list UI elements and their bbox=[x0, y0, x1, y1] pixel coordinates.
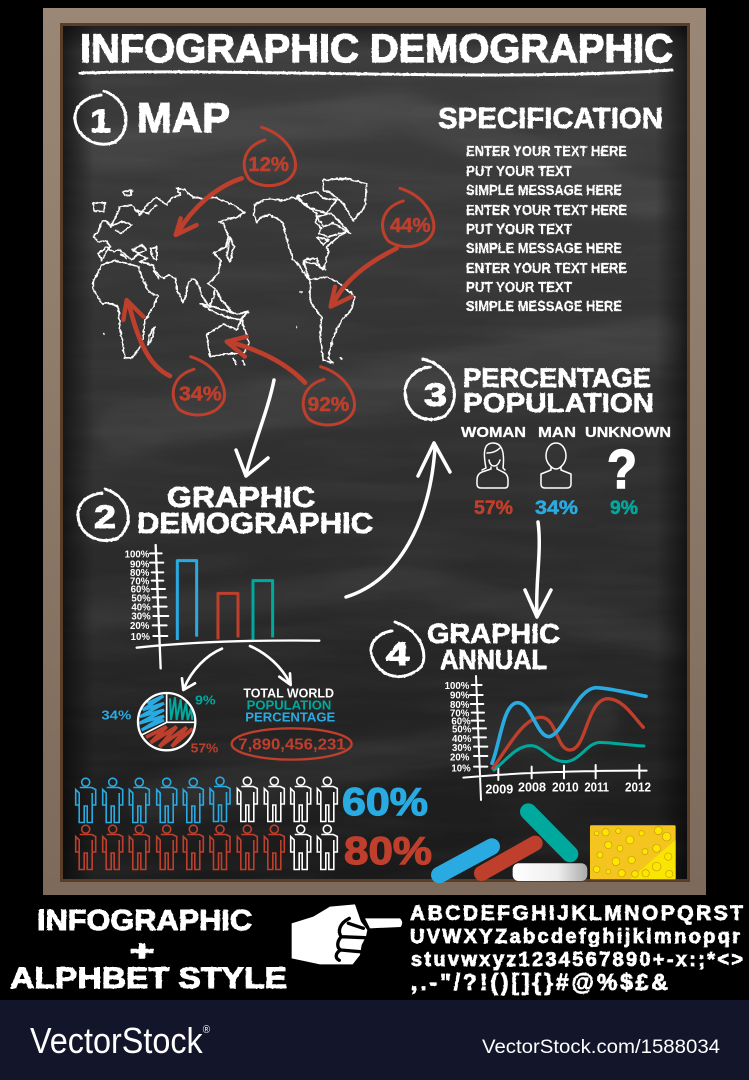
section 3 heading: percentage population: POPULATION bbox=[463, 388, 654, 418]
arrow: to pie bbox=[182, 649, 222, 690]
bar chart axes bbox=[137, 545, 319, 668]
line: red bbox=[493, 699, 643, 768]
line chart bbox=[439, 676, 676, 881]
section 4 heading: graphic annual: 4 bbox=[386, 636, 409, 672]
line chart axes bbox=[463, 676, 647, 800]
pie labels bbox=[101, 694, 218, 756]
line chart scale labels: 30% bbox=[452, 743, 472, 754]
bar chart scale labels: 50% bbox=[131, 593, 151, 604]
pictogram row: 60%: 60% bbox=[342, 781, 428, 824]
line chart year labels: 2009 bbox=[485, 782, 513, 796]
specification text block: SIMPLE MESSAGE HERE bbox=[466, 298, 622, 315]
chalk: teal bbox=[528, 812, 570, 854]
callout: 44%: 44% bbox=[390, 215, 431, 237]
line chart year labels: 2010 bbox=[552, 780, 579, 794]
chalkboard surface bbox=[63, 26, 687, 879]
pictogram row: 80%: 80% bbox=[344, 830, 432, 873]
map: central america link bbox=[303, 258, 327, 270]
map: madagascar bbox=[147, 327, 155, 345]
chalk: red bbox=[482, 843, 535, 873]
bar chart scale labels: 60% bbox=[131, 585, 150, 596]
map: south america bbox=[310, 277, 355, 363]
specification text block: ENTER YOUR TEXT HERE bbox=[466, 260, 627, 277]
callout: 34% bbox=[123, 300, 225, 415]
title: INFOGRAPHIC DEMOGRAPHIC bbox=[80, 27, 673, 71]
chalk pieces bbox=[439, 812, 587, 881]
callout: 44% bbox=[331, 188, 434, 307]
line chart scale labels: 60% bbox=[451, 716, 471, 727]
line chart year labels: 2012 bbox=[625, 781, 651, 795]
specification text block: PUT YOUR TEXT bbox=[466, 163, 572, 180]
total world population percentage: TOTAL WORLD bbox=[243, 686, 334, 700]
bar chart scale labels: 10% bbox=[131, 632, 150, 643]
section 2 heading: graphic demographic: DEMOGRAPHIC bbox=[137, 508, 373, 540]
unknown column: ? bbox=[607, 438, 637, 500]
icon: pointing hand bbox=[292, 904, 402, 964]
line chart year labels: 2011 bbox=[584, 780, 609, 794]
map: greenland and arctic islands bbox=[297, 178, 367, 245]
unknown column: 9% bbox=[610, 498, 638, 519]
section 3 heading: percentage population bbox=[405, 359, 654, 420]
map: inland seas bbox=[120, 245, 159, 280]
unknown column: UNKNOWN bbox=[585, 424, 671, 441]
unknown column bbox=[585, 424, 671, 519]
bar chart scale labels: 20% bbox=[130, 621, 150, 632]
chalk: white bbox=[513, 863, 587, 881]
callout: 12% bbox=[176, 127, 296, 235]
specification text block: SPECIFICATION bbox=[438, 103, 663, 135]
bottom heading: infographic + alphabet style bbox=[10, 905, 287, 995]
pie labels: 57% bbox=[191, 742, 218, 756]
sponge bbox=[590, 825, 676, 879]
alphabet specimen: ABCDEFGHIJKLMNOPQRST bbox=[410, 902, 743, 925]
alphabet specimen: UVWXYZabcdefghijklmnopqr bbox=[410, 926, 740, 948]
section 4 heading: graphic annual: GRAPHIC bbox=[427, 618, 560, 649]
callout: 92%: 92% bbox=[308, 394, 350, 416]
line: teal bbox=[494, 742, 644, 770]
map: small islands bbox=[93, 190, 342, 359]
total world population percentage: POPULATION bbox=[247, 698, 331, 712]
map: scandinavia and baltic detail bbox=[110, 205, 157, 233]
arrow: to percentage population bbox=[346, 443, 450, 597]
bottom heading: infographic + alphabet style: + bbox=[130, 935, 154, 966]
specification text block: SIMPLE MESSAGE HERE bbox=[466, 182, 622, 199]
section 3 heading: percentage population: PERCENTAGE bbox=[463, 363, 651, 393]
man column: 34% bbox=[535, 498, 578, 519]
arrow: to graphic annual bbox=[525, 522, 551, 617]
map: north america bbox=[254, 197, 347, 280]
bar chart scale labels: 30% bbox=[131, 611, 151, 622]
map: australia bbox=[207, 320, 249, 357]
specification text block: PUT YOUR TEXT bbox=[466, 279, 572, 296]
line chart scale labels: 90% bbox=[450, 691, 470, 702]
alphabet specimen bbox=[410, 902, 743, 995]
pictogram row: 80% bbox=[76, 825, 432, 873]
woman column: WOMAN bbox=[461, 424, 526, 441]
section 2 heading: graphic demographic bbox=[78, 482, 373, 541]
line chart scale labels: 10% bbox=[451, 763, 471, 774]
bottom heading: infographic + alphabet style: ALPHBET STYLE bbox=[10, 962, 287, 995]
man column bbox=[535, 424, 578, 519]
line chart scale labels: 80% bbox=[450, 700, 470, 711]
section 1 heading: map: 1 bbox=[90, 103, 111, 139]
world map bbox=[93, 178, 367, 366]
alphabet specimen: stuvwxyz1234567890+-x:;*<> bbox=[411, 949, 743, 971]
section 4 heading: graphic annual bbox=[371, 618, 560, 677]
bar: red bbox=[218, 593, 238, 639]
woman column: 57% bbox=[474, 498, 513, 519]
man column: MAN bbox=[538, 424, 576, 441]
bar chart scale labels: 40% bbox=[131, 602, 151, 613]
line chart year labels bbox=[485, 780, 651, 796]
bar chart scale labels: 90% bbox=[130, 559, 150, 570]
alphabet specimen: ,.-"/?!()[]{}#@%$£& bbox=[411, 969, 668, 995]
bar chart scale labels bbox=[125, 549, 151, 643]
map callouts bbox=[123, 127, 434, 425]
callout: 34%: 34% bbox=[179, 384, 222, 406]
map: eurasia bbox=[93, 188, 245, 307]
line chart scale labels: 20% bbox=[450, 752, 470, 763]
line chart scale labels bbox=[445, 681, 472, 774]
arrow: map to graphic demographic bbox=[236, 380, 274, 476]
callout: 12%: 12% bbox=[248, 154, 289, 176]
line chart scale labels: 40% bbox=[452, 734, 472, 745]
specification text block: ENTER YOUR TEXT HERE bbox=[466, 202, 627, 219]
section 4 heading: graphic annual: ANNUAL bbox=[440, 644, 547, 675]
bar chart scale labels: 100% bbox=[125, 549, 150, 560]
pictogram row: 60% bbox=[76, 777, 428, 824]
wooden frame bbox=[43, 8, 706, 895]
section 2 heading: graphic demographic: 2 bbox=[94, 499, 116, 535]
section 1 heading: map bbox=[75, 91, 230, 144]
footer bar bbox=[0, 1000, 749, 1080]
line: blue bbox=[492, 688, 646, 763]
section 1 heading: map: MAP bbox=[137, 94, 230, 141]
footer image id: VectorStock.com/1588034 bbox=[482, 1037, 720, 1058]
total world population percentage: 7,890,456,231 bbox=[238, 736, 346, 753]
woman column bbox=[461, 424, 526, 519]
specification text block: ENTER YOUR TEXT HERE bbox=[466, 143, 627, 160]
specification text block bbox=[438, 103, 663, 315]
map: africa bbox=[93, 261, 158, 358]
line chart scale labels: 100% bbox=[445, 681, 470, 692]
bottom heading: infographic + alphabet style: INFOGRAPHIC bbox=[37, 905, 252, 937]
line chart scale labels: 50% bbox=[452, 725, 472, 736]
footer brand: ® bbox=[203, 1024, 210, 1036]
bar: blue bbox=[177, 561, 197, 640]
bar chart scale labels: 70% bbox=[130, 577, 150, 588]
pie labels: 34% bbox=[101, 708, 131, 722]
arrow: to total bbox=[250, 646, 291, 685]
total world population percentage: PERCENTAGE bbox=[245, 710, 335, 724]
callout: 92% bbox=[227, 337, 355, 425]
map: southeast asia islands bbox=[200, 237, 248, 320]
specification text block: PUT YOUR TEXT bbox=[466, 221, 572, 238]
population breakdown bbox=[461, 424, 671, 519]
section 2 heading: graphic demographic: GRAPHIC bbox=[167, 482, 315, 514]
bar: teal bbox=[253, 581, 273, 639]
footer brand: VectorStock bbox=[30, 1020, 222, 1061]
bar chart scale labels: 80% bbox=[130, 568, 150, 579]
specification text block: SIMPLE MESSAGE HERE bbox=[466, 240, 622, 257]
pie labels: 9% bbox=[195, 694, 216, 708]
bar chart bbox=[101, 545, 352, 760]
line chart year labels: 2008 bbox=[518, 780, 546, 794]
pie chart bbox=[138, 693, 195, 750]
section 3 heading: percentage population: 3 bbox=[424, 377, 447, 413]
total world population percentage bbox=[232, 686, 352, 760]
chalk: blue bbox=[439, 847, 492, 875]
line chart scale labels: 70% bbox=[450, 708, 470, 719]
map: new zealand and tasmania bbox=[233, 358, 245, 366]
